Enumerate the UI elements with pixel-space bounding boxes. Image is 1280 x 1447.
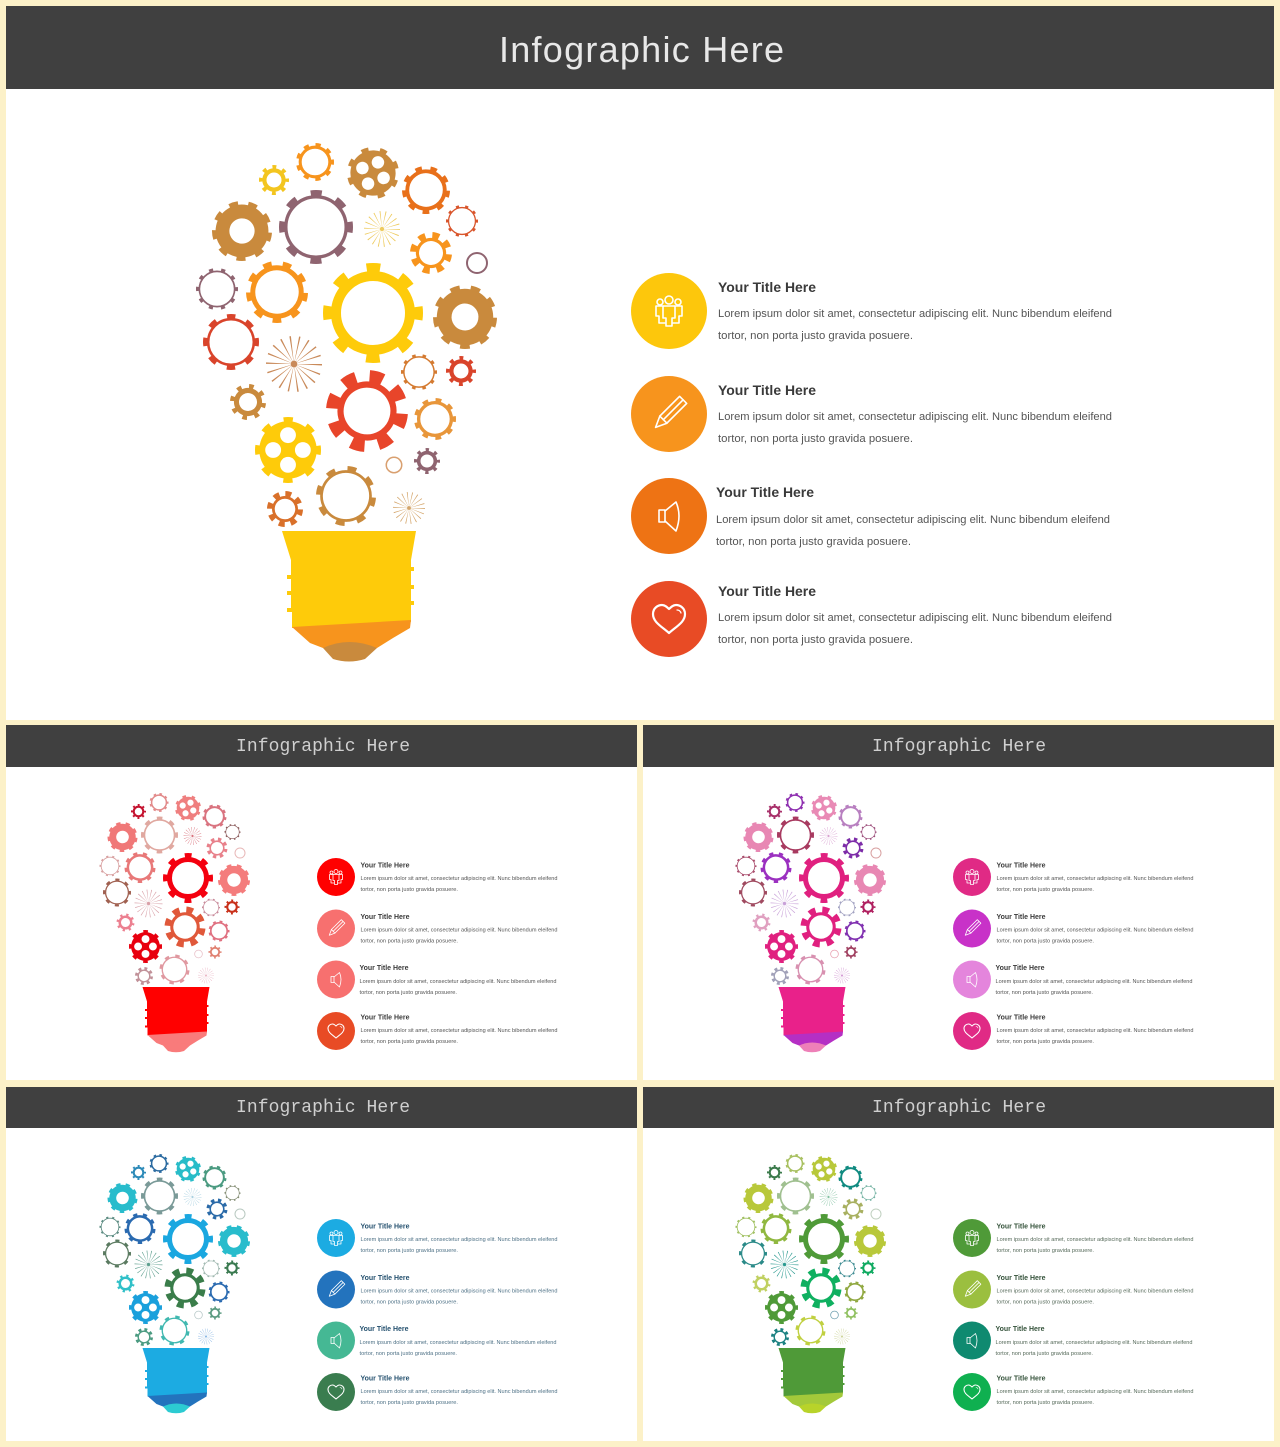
pink gear light bulb [736, 792, 887, 1052]
red list item 3: Your Title Here [360, 965, 409, 972]
green gear light bulb [736, 1153, 887, 1413]
pink list item 2: Your Title Here [996, 914, 1046, 921]
panel: blue variant [6, 1087, 637, 1441]
blue list item 4: tortor, non porta justo gravida posuere. [360, 1400, 458, 1406]
pink list item 2 [953, 910, 1194, 948]
list item 3: Your Title Here [716, 484, 814, 500]
green list item 3: tortor, non porta justo gravida posuere. [996, 1351, 1093, 1357]
green header bar [643, 1087, 1274, 1128]
green list item 1 [953, 1219, 1194, 1257]
list item 1: tortor, non porta justo gravida posuere. [718, 330, 913, 342]
red list item 1: Lorem ipsum dolor sit amet, consectetur adipiscing elit. Nunc bibendum eleifend [360, 876, 558, 882]
list item 4: tortor, non porta justo gravida posuere. [718, 634, 913, 646]
green list item 2: Your Title Here [996, 1275, 1046, 1282]
blue list item 1 [317, 1219, 558, 1257]
blue list item 3: Your Title Here [360, 1326, 409, 1333]
blue list item 1: Your Title Here [360, 1224, 410, 1230]
red list item 3 [317, 960, 556, 998]
blue gear light bulb [100, 1153, 251, 1413]
panel: red variant [6, 725, 637, 1080]
green list item 3: Your Title Here [996, 1326, 1045, 1333]
list item 1 [631, 273, 1112, 349]
pink list item 1: Your Title Here [996, 862, 1046, 870]
pink list item 4: tortor, non porta justo gravida posuere. [996, 1039, 1094, 1045]
pink panel title: Infographic Here [872, 737, 1046, 757]
panel: main yellow-orange infographic [6, 6, 1274, 720]
pink list item 3: Lorem ipsum dolor sit amet, consectetur adipiscing elit. Nunc bibendum eleifend [996, 979, 1192, 985]
main header bar [6, 6, 1274, 89]
gear light bulb [197, 141, 499, 661]
red list item 2: tortor, non porta justo gravida posuere. [360, 938, 458, 944]
green list item 1: Your Title Here [996, 1224, 1046, 1230]
red list item 4: Your Title Here [360, 1014, 410, 1022]
list item 4: Your Title Here [718, 583, 816, 599]
list item 2: tortor, non porta justo gravida posuere. [718, 433, 913, 445]
red list item 4: Lorem ipsum dolor sit amet, consectetur adipiscing elit. Nunc bibendum eleifend [360, 1028, 558, 1034]
pink list item 1: tortor, non porta justo gravida posuere. [996, 887, 1094, 893]
red list item 4 [317, 1012, 558, 1050]
blue list item 1: Lorem ipsum dolor sit amet, consectetur adipiscing elit. Nunc bibendum eleifend [360, 1237, 558, 1243]
red list item 2: Your Title Here [360, 914, 410, 921]
blue panel title: Infographic Here [236, 1098, 410, 1118]
blue list item 3: Lorem ipsum dolor sit amet, consectetur adipiscing elit. Nunc bibendum eleifend [360, 1340, 556, 1346]
blue list item 4 [317, 1373, 558, 1411]
blue list item 2: Your Title Here [360, 1275, 410, 1282]
list item 1: Your Title Here [718, 279, 816, 295]
pink list item 4: Lorem ipsum dolor sit amet, consectetur adipiscing elit. Nunc bibendum eleifend [996, 1028, 1194, 1034]
green list item 1: tortor, non porta justo gravida posuere. [996, 1248, 1094, 1254]
green list item 2: tortor, non porta justo gravida posuere. [996, 1300, 1094, 1306]
red list item 1: Your Title Here [360, 862, 410, 870]
green list item 2 [953, 1270, 1194, 1308]
red header bar [6, 725, 637, 767]
pink panel content [736, 792, 1194, 1052]
red list item 2 [317, 910, 558, 948]
list item 4 [631, 581, 1112, 657]
blue list item 1: tortor, non porta justo gravida posuere. [360, 1248, 458, 1254]
pink header bar [643, 725, 1274, 767]
list item 1: Lorem ipsum dolor sit amet, consectetur adipiscing elit. Nunc bibendum eleifend [718, 308, 1112, 320]
green list item 3: Lorem ipsum dolor sit amet, consectetur adipiscing elit. Nunc bibendum eleifend [996, 1340, 1192, 1346]
red panel title: Infographic Here [236, 737, 410, 757]
list item 4: Lorem ipsum dolor sit amet, consectetur adipiscing elit. Nunc bibendum eleifend [718, 612, 1112, 624]
red list item 4: tortor, non porta justo gravida posuere. [360, 1039, 458, 1045]
pink list item 4 [953, 1012, 1194, 1050]
pink list item 1: Lorem ipsum dolor sit amet, consectetur adipiscing elit. Nunc bibendum eleifend [996, 876, 1194, 882]
red list item 1: tortor, non porta justo gravida posuere. [360, 887, 458, 893]
blue list item 2 [317, 1270, 558, 1308]
red list item 2: Lorem ipsum dolor sit amet, consectetur adipiscing elit. Nunc bibendum eleifend [360, 928, 558, 934]
red panel content [100, 792, 558, 1052]
pink list item 4: Your Title Here [996, 1014, 1046, 1022]
list item 2 [631, 376, 1112, 452]
pink list item 3: tortor, non porta justo gravida posuere. [996, 990, 1093, 996]
green list item 2: Lorem ipsum dolor sit amet, consectetur adipiscing elit. Nunc bibendum eleifend [996, 1288, 1194, 1294]
green list item 4 [953, 1373, 1194, 1411]
list item 3: Lorem ipsum dolor sit amet, consectetur adipiscing elit. Nunc bibendum eleifend [716, 514, 1110, 526]
blue list item 4: Lorem ipsum dolor sit amet, consectetur adipiscing elit. Nunc bibendum eleifend [360, 1389, 558, 1395]
blue list item 2: tortor, non porta justo gravida posuere. [360, 1300, 458, 1306]
red list item 1 [317, 858, 558, 896]
list item 2: Your Title Here [718, 382, 816, 398]
green panel title: Infographic Here [872, 1098, 1046, 1118]
gears cluster [197, 141, 499, 529]
red list item 3: Lorem ipsum dolor sit amet, consectetur adipiscing elit. Nunc bibendum eleifend [360, 979, 556, 985]
green list item 4: tortor, non porta justo gravida posuere. [996, 1400, 1094, 1406]
green list item 4: Your Title Here [996, 1376, 1046, 1382]
red list item 3: tortor, non porta justo gravida posuere. [360, 990, 457, 996]
panel: pink variant [643, 725, 1274, 1080]
pink list item 1 [953, 858, 1194, 896]
blue list item 3: tortor, non porta justo gravida posuere. [360, 1351, 457, 1357]
pink list item 3: Your Title Here [996, 965, 1045, 972]
green list item 3 [953, 1322, 1192, 1360]
green panel content [736, 1153, 1194, 1413]
list item 2: Lorem ipsum dolor sit amet, consectetur adipiscing elit. Nunc bibendum eleifend [718, 411, 1112, 423]
blue list item 2: Lorem ipsum dolor sit amet, consectetur adipiscing elit. Nunc bibendum eleifend [360, 1288, 558, 1294]
blue header bar [6, 1087, 637, 1128]
main title: Infographic Here [499, 29, 784, 70]
bulb base [282, 531, 416, 662]
list item 3: tortor, non porta justo gravida posuere. [716, 536, 911, 548]
list item 3 [631, 478, 1110, 554]
green list item 4: Lorem ipsum dolor sit amet, consectetur adipiscing elit. Nunc bibendum eleifend [996, 1389, 1194, 1395]
pink list item 2: tortor, non porta justo gravida posuere. [996, 938, 1094, 944]
pink list item 2: Lorem ipsum dolor sit amet, consectetur adipiscing elit. Nunc bibendum eleifend [996, 928, 1194, 934]
blue list item 4: Your Title Here [360, 1376, 410, 1382]
panel: green variant [643, 1087, 1274, 1441]
pink list item 3 [953, 960, 1192, 998]
blue panel content [100, 1153, 558, 1413]
red gear light bulb [100, 792, 251, 1052]
green list item 1: Lorem ipsum dolor sit amet, consectetur adipiscing elit. Nunc bibendum eleifend [996, 1237, 1194, 1243]
blue list item 3 [317, 1322, 556, 1360]
